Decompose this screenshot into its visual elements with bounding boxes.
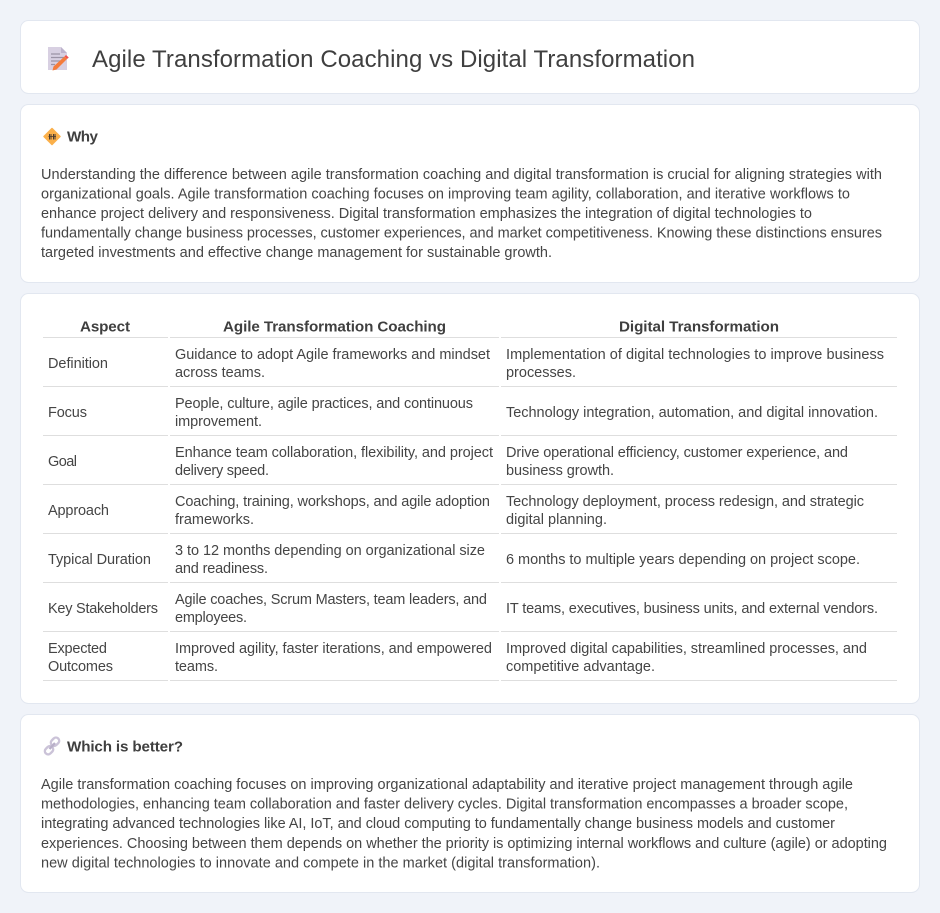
text block: which is better paragraph: Agile transformation coaching focuses on improving organizational adaptability and iterative project management through agile (41, 777, 853, 793)
text block: which is better paragraph: experiences. Choosing between them depends on whether the priority is optimizing internal workflows and culture (agile) or adopting (41, 836, 887, 852)
heading: which is better: Which is better? (67, 738, 183, 756)
table row: typical duration (48, 543, 860, 577)
table row: definition: Definition (48, 356, 108, 372)
icon: chain link (44, 736, 61, 756)
panel: which is better (20, 714, 920, 892)
table row: expected outcomes: Outcomes (48, 659, 113, 675)
title: Agile Transformation Coaching vs Digital Transformation (92, 46, 695, 73)
table row: definition (48, 347, 884, 381)
table row: approach: Approach (48, 503, 109, 519)
table row: focus: improvement. (175, 414, 262, 430)
table row: focus: People, culture, agile practices, and continuous (175, 396, 473, 412)
table row: key stakeholders: employees. (175, 610, 247, 626)
table row: focus: Technology integration, automation, and digital innovation. (506, 405, 878, 421)
table row: key stakeholders: Key Stakeholders (48, 601, 158, 617)
table row: approach: digital planning. (506, 512, 607, 528)
table row: key stakeholders (48, 592, 878, 626)
table row: goal (48, 445, 848, 479)
table row: goal: Enhance team collaboration, flexibility, and project (175, 445, 493, 461)
heading: why: Why (67, 128, 99, 146)
table header row: Aspect (80, 318, 130, 336)
table row: goal: Drive operational efficiency, customer experience, and (506, 445, 848, 461)
table header row: Agile Transformation Coaching (223, 318, 446, 336)
text block: why paragraph (41, 167, 882, 261)
table row: expected outcomes: Improved digital capabilities, streamlined processes, and (506, 641, 867, 657)
table row: definition: processes. (506, 365, 576, 381)
panel: why (20, 104, 920, 282)
table row: goal: delivery speed. (175, 463, 269, 479)
table row: expected outcomes: Expected (48, 641, 107, 657)
table row: expected outcomes: teams. (175, 659, 218, 675)
icon: orange diamond sign (44, 128, 60, 144)
table row: key stakeholders: IT teams, executives, business units, and external vendors. (506, 601, 878, 617)
table row: definition: Implementation of digital technologies to improve business (506, 347, 884, 363)
table row: goal: business growth. (506, 463, 614, 479)
text block: why paragraph: targeted investments and effective change management for sustainable growth. (41, 245, 552, 261)
table row: approach: frameworks. (175, 512, 254, 528)
table row: typical duration: 6 months to multiple years depending on project scope. (506, 552, 860, 568)
text block: which is better paragraph: methodologies, enhancing team collaboration and faster delivery cycles. Digital transformation encompasses a broader scope, (41, 797, 848, 813)
table header row: Digital Transformation (619, 318, 779, 336)
table row: typical duration: Typical Duration (48, 552, 151, 568)
table row: definition: across teams. (175, 365, 265, 381)
text block: why paragraph: fundamentally change business processes, customer experiences, and market competitiveness. Knowing these distinctions ensures (41, 226, 882, 242)
table row: focus (48, 396, 878, 430)
text block: why paragraph: organizational goals. Agile transformation coaching focuses on improving team agility, collaboration, and iterative workflows to (41, 186, 850, 202)
panel: page header (20, 20, 920, 94)
text block: why paragraph: enhance project delivery and responsiveness. Digital transformation emphasizes the integration of digital technologies to (41, 206, 812, 222)
table row: expected outcomes: Improved agility, faster iterations, and empowered (175, 641, 492, 657)
table row: key stakeholders: Agile coaches, Scrum Masters, team leaders, and (175, 592, 487, 608)
table row: typical duration: 3 to 12 months depending on organizational size (175, 543, 485, 559)
table row: definition: Guidance to adopt Agile frameworks and mindset (175, 347, 490, 363)
text block: which is better paragraph: new digital technologies to innovate and compete in the market (digital transformation). (41, 855, 600, 871)
table row: approach: Technology deployment, process redesign, and strategic (506, 494, 864, 510)
text block: why paragraph: Understanding the difference between agile transformation coaching and digital transformation is crucial for aligning strategies with (41, 167, 882, 183)
table row: expected outcomes (48, 641, 867, 675)
text block: which is better paragraph: integrating advanced technologies like AI, IoT, and cloud computing to fundamentally change business models and customer (41, 816, 835, 832)
table header row (80, 318, 779, 336)
table row: focus: Focus (48, 405, 87, 421)
panel: comparison table (20, 294, 920, 704)
icon: memo with pencil (48, 47, 69, 70)
text block: which is better paragraph (41, 777, 887, 871)
table row: typical duration: and readiness. (175, 561, 268, 577)
table row: goal: Goal (48, 454, 77, 470)
table row: approach (48, 494, 864, 528)
table row: expected outcomes: competitive advantage. (506, 659, 655, 675)
table row: approach: Coaching, training, workshops, and agile adoption (175, 494, 490, 510)
